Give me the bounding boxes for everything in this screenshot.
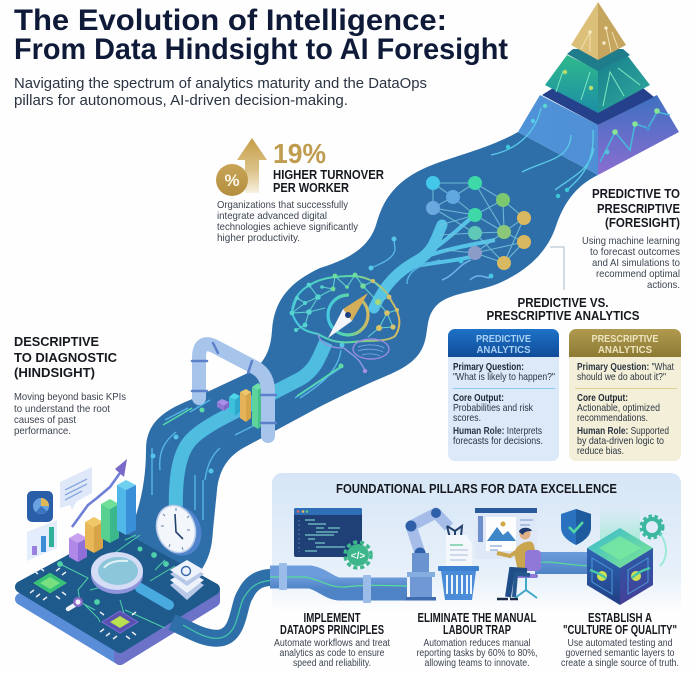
pillar: manual labour trap: ELIMINATE THE MANUAL bbox=[418, 610, 537, 625]
text block: descriptive to diagnostic: performance. bbox=[14, 426, 71, 437]
icon: analyst at screen bbox=[475, 508, 541, 599]
icon: percent with arrow bbox=[216, 138, 267, 196]
subtitle: Navigating the spectrum of analytics maturity and the DataOps bbox=[14, 75, 427, 92]
comparison heading: PREDICTIVE VS. bbox=[518, 295, 608, 310]
icon: purple chip bbox=[100, 611, 138, 639]
pyramid base tier bbox=[491, 88, 679, 198]
icon: shield bbox=[561, 509, 591, 545]
stat callout: 19%: Organizations that successfully bbox=[217, 200, 349, 211]
panel: predictive analytics card: scores. bbox=[453, 413, 481, 424]
panel: predictive analytics card: Probabilities and risk bbox=[453, 403, 534, 414]
panel: predictive analytics card: Primary Question: bbox=[453, 362, 524, 373]
pillar: culture of quality: ESTABLISH A bbox=[588, 610, 652, 625]
panel: prescriptive analytics card: Core Output: bbox=[577, 393, 628, 404]
icon: toggle knob bbox=[68, 597, 83, 609]
stat callout: 19%: technologies achieve significantly bbox=[217, 222, 359, 233]
pillar: culture of quality: Use automated testing and bbox=[568, 638, 672, 649]
bar: blue bbox=[117, 480, 136, 535]
icon: code gear: </> bbox=[351, 551, 365, 562]
pillar: manual labour trap: allowing teams to innovate. bbox=[424, 658, 530, 669]
circuit traces bbox=[58, 535, 175, 628]
icon: chat bubble bbox=[60, 467, 92, 510]
panel: prescriptive analytics card: should we do about it?" bbox=[577, 372, 666, 383]
panel: prescriptive analytics card bbox=[569, 329, 681, 461]
panel: predictive analytics card: ANALYTICS bbox=[476, 345, 531, 356]
title bbox=[14, 4, 508, 66]
pillar: manual labour trap: reporting tasks by 60% to 80%, bbox=[416, 648, 538, 659]
ribbon: data journey path bbox=[120, 132, 598, 600]
text block: predictive to prescriptive: Using machine learning bbox=[582, 236, 680, 247]
panel: prescriptive analytics card: Human Role: Supported bbox=[577, 426, 669, 437]
comparison heading: PRESCRIPTIVE ANALYTICS bbox=[486, 308, 640, 323]
panel: prescriptive analytics card: recommendations. bbox=[577, 413, 648, 424]
icon: pie chart card bbox=[27, 491, 53, 522]
text block: predictive to prescriptive bbox=[582, 186, 680, 291]
pillar: dataops principles: DATAOPS PRINCIPLES bbox=[280, 622, 384, 637]
trend arrow bbox=[72, 459, 127, 527]
icon: teal gear bbox=[641, 516, 666, 566]
panel: predictive analytics card: Core Output: bbox=[453, 393, 504, 404]
pillar: dataops principles: speed and reliability. bbox=[293, 658, 371, 669]
panel: prescriptive analytics card: by data-driven logic to bbox=[577, 436, 664, 447]
icon: green chip bbox=[30, 568, 68, 600]
text block: predictive to prescriptive: recommend optimal bbox=[596, 269, 680, 280]
icon: percent with arrow: % bbox=[224, 171, 240, 190]
pyramid middle tier bbox=[545, 49, 650, 113]
pyramid bbox=[491, 2, 679, 198]
bar: green bbox=[101, 499, 119, 543]
pillar: manual labour trap: LABOUR TRAP bbox=[443, 622, 511, 637]
text block: predictive to prescriptive: to forecast outcomes bbox=[590, 247, 680, 258]
panel: prescriptive analytics card: ANALYTICS bbox=[598, 345, 652, 356]
icon: code gear bbox=[345, 542, 371, 568]
text block: predictive to prescriptive: and AI simulations to bbox=[592, 258, 680, 269]
comparison heading bbox=[486, 295, 640, 323]
platform bbox=[21, 459, 214, 659]
bar: purple bbox=[69, 533, 87, 562]
brain with compass bbox=[290, 273, 399, 373]
panel: predictive analytics card: PREDICTIVE bbox=[476, 334, 531, 345]
icon: code window bbox=[294, 508, 362, 557]
pillar: culture of quality bbox=[561, 610, 679, 669]
text block: descriptive to diagnostic: causes of past bbox=[14, 415, 76, 426]
pyramid gold capstone bbox=[571, 2, 626, 60]
panel: foundational pillars bbox=[270, 473, 681, 613]
stat callout: 19%: higher productivity. bbox=[217, 233, 300, 244]
text block: predictive to prescriptive: (FORESIGHT) bbox=[605, 215, 680, 230]
pillar: culture of quality: governed semantic layers to bbox=[566, 648, 675, 659]
text block: predictive to prescriptive: PREDICTIVE TO bbox=[592, 186, 680, 201]
lower connecting pipe bbox=[172, 577, 278, 638]
panel: prescriptive analytics card: Primary Question: "What bbox=[577, 362, 674, 373]
text block: descriptive to diagnostic bbox=[14, 334, 126, 437]
text block: predictive to prescriptive: actions. bbox=[647, 280, 680, 291]
panel title: FOUNDATIONAL PILLARS FOR DATA EXCELLENCE bbox=[336, 481, 617, 496]
bar: gold bbox=[85, 517, 103, 553]
panel: predictive analytics card: "What is likely to happen?" bbox=[453, 372, 555, 383]
text block: predictive to prescriptive: PRESCRIPTIVE bbox=[597, 201, 680, 216]
stat callout: 19%: PER WORKER bbox=[273, 180, 350, 195]
panel: prescriptive analytics card: Actionable, optimized bbox=[577, 403, 660, 414]
overhead pipe bbox=[192, 343, 276, 436]
text block: descriptive to diagnostic: (HINDSIGHT) bbox=[14, 365, 95, 380]
panel: predictive analytics card: Human Role: Interprets bbox=[453, 426, 542, 437]
text block: descriptive to diagnostic: to understand the root bbox=[14, 404, 110, 415]
neural network bbox=[426, 176, 531, 280]
icon: trash basket with paper bbox=[438, 535, 479, 600]
icon: clock bbox=[151, 500, 208, 561]
title: The Evolution of Intelligence: bbox=[14, 4, 447, 37]
person bbox=[520, 528, 530, 540]
stat callout: 19% bbox=[216, 138, 385, 244]
stat callout: 19%: 19% bbox=[273, 138, 326, 169]
pillar: dataops principles: analytics as code to ensure bbox=[280, 648, 385, 659]
pillar: manual labour trap bbox=[416, 610, 538, 669]
subtitle: pillars for autonomous, AI-driven decision-making. bbox=[14, 92, 348, 109]
text block: descriptive to diagnostic: DESCRIPTIVE bbox=[14, 334, 99, 349]
pipeline bbox=[270, 552, 590, 603]
title: From Data Hindsight to AI Foresight bbox=[14, 33, 508, 66]
icon: data stack bbox=[170, 560, 204, 600]
icon: bar card bbox=[27, 520, 57, 561]
text block: descriptive to diagnostic: TO DIAGNOSTIC bbox=[14, 350, 118, 365]
stat callout: 19%: HIGHER TURNOVER bbox=[273, 167, 385, 182]
icon: robot arm bbox=[406, 508, 462, 600]
panel: prescriptive analytics card: PRESCRIPTIVE bbox=[592, 334, 659, 345]
panel: predictive analytics card: forecasts for decisions. bbox=[453, 436, 543, 447]
panel: prescriptive analytics card: reduce bias. bbox=[577, 446, 624, 457]
pillar: dataops principles: Automate workflows and treat bbox=[274, 638, 390, 649]
panel: predictive analytics card bbox=[448, 329, 559, 461]
pillar: dataops principles: IMPLEMENT bbox=[304, 610, 361, 625]
icon: data cube bbox=[587, 508, 653, 605]
pillar: manual labour trap: Automation reduces manual bbox=[424, 638, 530, 649]
subtitle bbox=[14, 75, 427, 109]
mini bar chart on ribbon bbox=[217, 383, 263, 429]
icon: magnifying glass bbox=[91, 552, 169, 605]
text block: descriptive to diagnostic: Moving beyond basic KPIs bbox=[14, 392, 126, 403]
stat callout: 19%: integrate advanced digital bbox=[217, 211, 327, 222]
pillar: dataops principles bbox=[274, 610, 390, 669]
pillar: culture of quality: create a single source of truth. bbox=[561, 658, 679, 669]
